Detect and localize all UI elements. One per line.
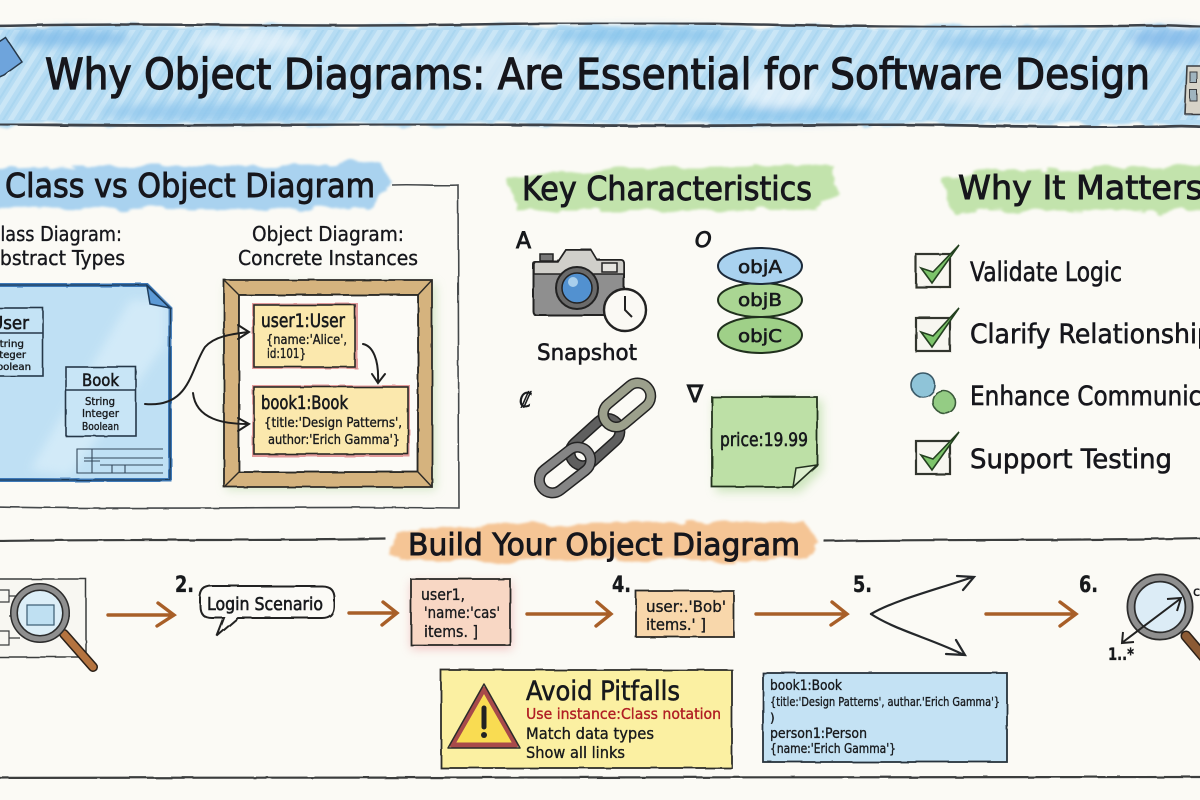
heading: class vs object diagram: Class vs Object Diagram [5,166,375,205]
heading highlight: build [392,522,816,561]
class box: book: String [85,395,115,408]
step 2: login scenario bubble [200,586,334,636]
object box: user1: id:101} [267,347,306,362]
item: enhance communication [911,373,1200,413]
callout: avoid pitfalls: Match data types [526,724,654,743]
object box: book1: author:'Erich Gamma'} [268,433,400,448]
sticky note: price:19.99 [720,429,808,451]
title block table [77,449,163,473]
code box: object example: person1:Person [770,726,867,742]
step 4: object stub: items.' ] [646,615,706,634]
panel: class vs object diagram [0,162,459,508]
code box: object example: book1:Book [770,678,843,694]
heading: key characteristics: Key Characteristics [522,169,812,208]
arrow: step 5 to 6 [986,602,1076,626]
object box: user1 [252,303,358,369]
arrow: book class to book1 [193,393,249,431]
subheading: object diagram: Object Diagram: [252,222,404,246]
step 4: object stub [636,591,734,637]
arrow: step 4 to 5 [756,602,847,625]
step 3: object stub: user1, [421,585,465,604]
step 3: object stub: items. ] [424,622,478,641]
step 6: magnifier with multiplicity: 1..* [1108,645,1134,665]
step 4: object stub: user:.'Bob' [646,597,726,616]
blueprint sheet [0,285,170,480]
subheading: object diagram [238,222,418,270]
sticky note [712,397,822,492]
letter marker link: ₡ [519,388,532,412]
section rules [0,538,1200,778]
icon: chain links [534,378,656,498]
arrow: step 3 to 4 [527,602,611,626]
item: clarify relationships [916,308,1200,351]
panel: why it matters [911,164,1200,475]
step 3: object stub: 'name:'cas' [424,603,500,622]
heading highlight: class vs object [0,162,390,209]
callout: avoid pitfalls [441,670,732,768]
heading highlight: key characteristics [508,164,836,212]
object box: book1: book1:Book [261,392,348,414]
callout: avoid pitfalls: Show all links [526,743,625,762]
code box: object example: ) [770,711,775,725]
step 1: inspect diagram [0,579,93,667]
icon: warning triangle [448,684,520,748]
object box: book1: {title:'Design Patterns', [264,416,402,431]
arrow: book class to user1 [145,325,249,404]
letter marker A: A [516,229,531,254]
oval: objB: objB [738,290,782,311]
callout: avoid pitfalls: Avoid Pitfalls [526,676,680,707]
class box: book: Boolean [82,420,119,433]
code box: object example: {title:'Design Patterns', authar.'Erich Gamma'} [770,695,1000,709]
callout: avoid pitfalls: Use instance:Class notation [526,705,721,723]
oval: objC: objC [738,326,782,347]
icon: blue document corner [0,38,22,78]
heading: why it matters: Why It Matters [958,168,1200,207]
object box: user1: user1:User [261,310,345,332]
arrow: user1 to book1 [363,344,385,383]
title banner [0,23,1200,127]
heading: build your object diagram: Build Your Object Diagram [408,528,800,563]
arrow: step 1 to 2 [108,603,174,626]
object stack [718,248,802,353]
step 3: object stub [411,579,512,649]
subheading: class diagram [0,222,125,270]
subheading: object diagram: Concrete Instances [238,246,418,270]
object box: user1: {name:'Alice', [266,333,347,348]
step 2 label: 2. [175,573,194,598]
icon: camera with clock [533,250,646,331]
item: validate logic [916,245,1122,288]
label: snapshot: Snapshot [537,341,637,366]
letter marker triangle: ∇ [686,380,704,408]
icon: building [1185,66,1200,114]
class box: book [66,367,136,436]
step 6: magnifier with multiplicity [1108,578,1200,665]
item: support testing: Support Testing [970,444,1172,475]
class box: user [0,308,43,376]
code box: object example [763,673,1007,762]
class box: book: Book [82,371,119,391]
oval: objA: objA [738,257,783,278]
code box: object example: {name:'Erich Gamma'} [770,742,896,757]
item: validate logic: Validate Logic [970,257,1122,288]
wooden frame [224,280,436,490]
item: support testing [916,432,1172,475]
heading highlight: why it matters [942,164,1200,212]
step 5 label: 5. [853,573,872,598]
panel: key characteristics [508,164,836,498]
class box: book: Integer [82,407,119,420]
object box: book1 [252,385,410,457]
icon: branching arrows [871,576,974,655]
step 6 label: 6. [1079,573,1098,598]
step 6: magnifier with multiplicity: c [1193,585,1200,600]
panel border [0,185,459,508]
panel: build your object diagram [0,522,1200,778]
step 2: login scenario bubble: Login Scenario [207,594,323,615]
step 4 label: 4. [612,573,631,598]
arrow: step 2 to 3 [349,602,397,625]
letter marker O: O [695,228,712,252]
